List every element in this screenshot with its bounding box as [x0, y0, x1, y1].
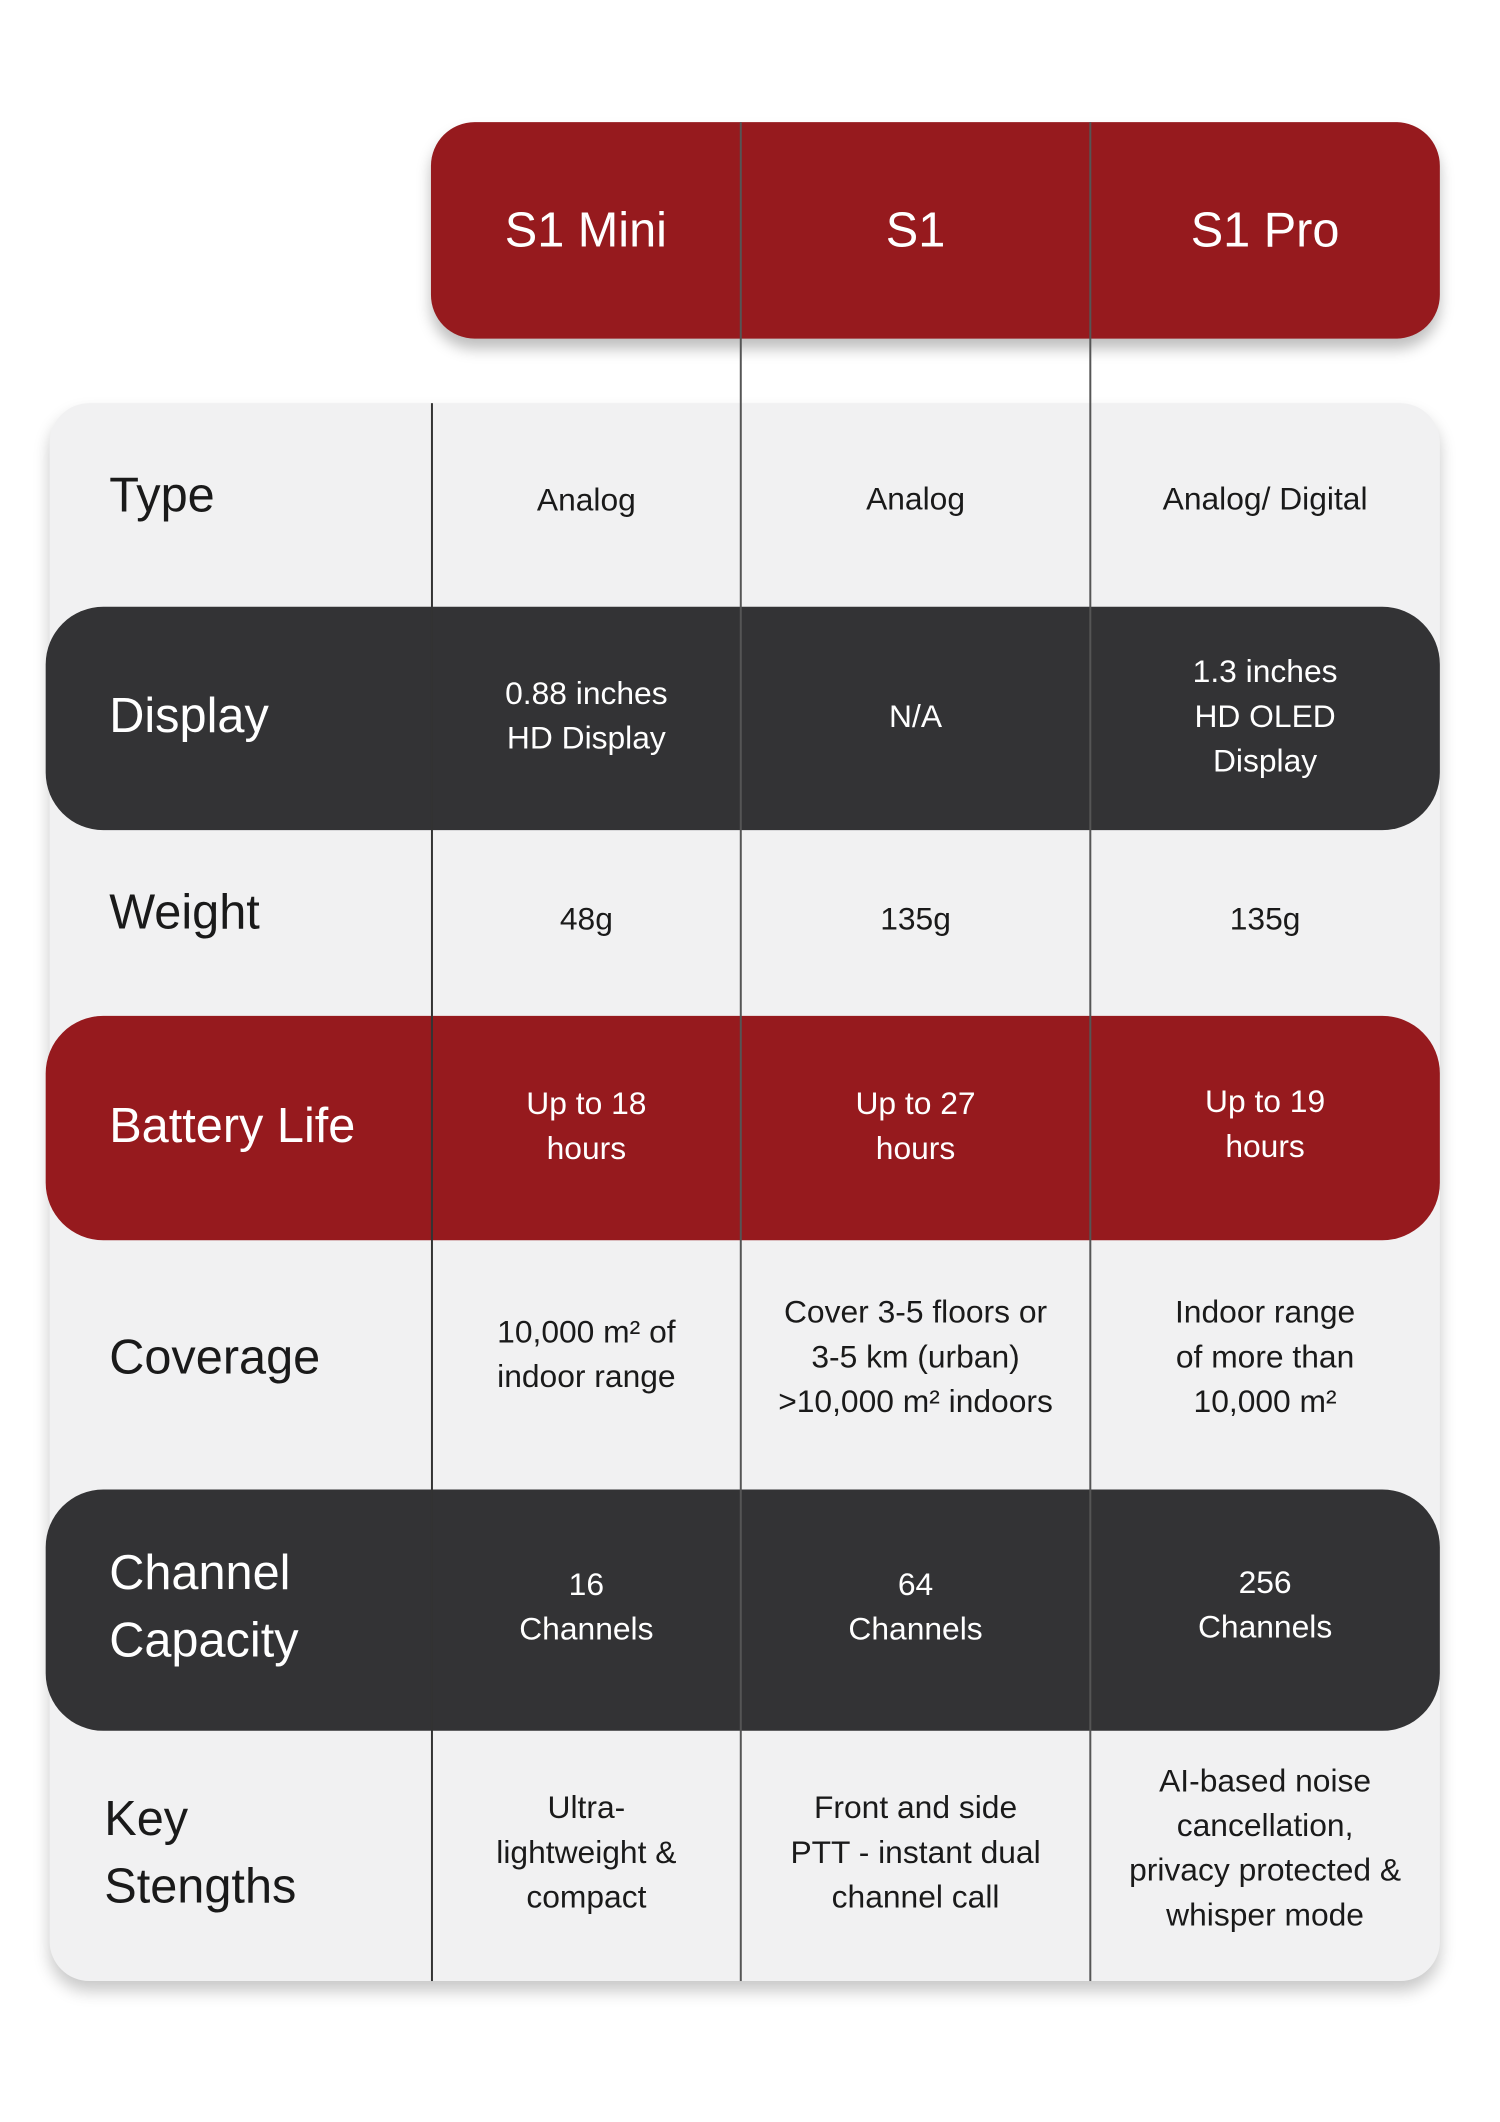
row: Weight [109, 885, 1300, 939]
header: S1 Pro: S1 Pro [1191, 204, 1339, 257]
row band: Battery Life [46, 1016, 1440, 1240]
cell: Channels [1198, 1609, 1332, 1644]
cell: Cover 3-5 floors or [784, 1294, 1047, 1330]
label: Weight: Weight [109, 885, 260, 939]
label: Coverage: Coverage [109, 1330, 320, 1384]
cell [526, 1085, 646, 1166]
header: S1: S1 [886, 204, 945, 257]
label: Battery Life: Battery Life [109, 1099, 355, 1153]
cell: Indoor range [1175, 1294, 1355, 1330]
cell: whisper mode [1166, 1896, 1364, 1932]
cell: 0.88 inches [505, 675, 668, 711]
cell: Analog [537, 482, 636, 517]
cell [1175, 1294, 1355, 1419]
cell: AI-based noise [1159, 1762, 1371, 1798]
cell: HD Display [507, 720, 666, 756]
cell [778, 1294, 1053, 1419]
cell: 64 [898, 1566, 933, 1602]
cell: of more than [1176, 1339, 1354, 1374]
row: Display [109, 653, 1338, 778]
table panel [50, 403, 1440, 1981]
cell: Display [1213, 742, 1317, 778]
cell: privacy protected & [1129, 1851, 1401, 1887]
row: Key Strengths [104, 1762, 1401, 1932]
cell: HD OLED [1194, 698, 1336, 733]
row: Coverage [109, 1294, 1355, 1419]
label: Key Strengths [104, 1792, 296, 1913]
cell: 1.3 inches [1193, 653, 1338, 689]
cell: PTT - instant dual [790, 1834, 1041, 1870]
cell: 10,000 m² [1194, 1383, 1337, 1419]
cell: compact [526, 1879, 646, 1915]
cell: hours [547, 1130, 626, 1166]
cell: channel call [832, 1879, 999, 1915]
cell: cancellation, [1177, 1807, 1353, 1843]
cell [1205, 1083, 1325, 1164]
cell: lightweight & [496, 1834, 676, 1870]
cell [790, 1789, 1041, 1915]
cell: hours [1225, 1128, 1305, 1164]
cell: Ultra- [548, 1789, 625, 1825]
row: Channel Capacity [109, 1546, 1332, 1667]
cell: Up to 19 [1205, 1083, 1325, 1119]
row: Battery Life [109, 1083, 1325, 1166]
cell [848, 1566, 983, 1646]
cell [1198, 1564, 1332, 1644]
cell: N/A [889, 698, 942, 733]
label: Display: Display [109, 689, 269, 743]
label: Key Strengths: Stengths [104, 1859, 296, 1913]
label: Channel Capacity [109, 1546, 299, 1667]
cell: 48g [560, 900, 613, 936]
cell: Analog [866, 480, 965, 516]
cell: 3-5 km (urban) [811, 1339, 1020, 1374]
cell [1129, 1762, 1401, 1932]
cell: 256 [1239, 1564, 1292, 1600]
cell: 135g [880, 900, 951, 936]
cell: Channels [519, 1611, 653, 1646]
cell: Up to 18 [526, 1085, 646, 1121]
cell: 135g [1230, 900, 1300, 936]
cell: hours [876, 1130, 955, 1166]
label: Key Strengths: Key [104, 1792, 188, 1845]
row band: Channel Capacity [46, 1490, 1440, 1731]
cell: 16 [569, 1566, 604, 1602]
cell: Front and side [814, 1789, 1017, 1825]
row: Type [109, 468, 1368, 522]
cell: >10,000 m² indoors [778, 1383, 1053, 1419]
cell [496, 1789, 676, 1915]
cell: Channels [848, 1611, 983, 1646]
cell [519, 1566, 653, 1646]
label: Channel Capacity: Capacity [109, 1614, 299, 1667]
cell [505, 675, 668, 756]
cell: Up to 27 [855, 1085, 976, 1121]
cell [1193, 653, 1338, 778]
cell [497, 1314, 676, 1394]
row band: Display [46, 607, 1440, 830]
label: Channel Capacity: Channel [109, 1546, 290, 1600]
header: S1 Mini: S1 Mini [505, 204, 667, 257]
header bar [431, 122, 1440, 339]
label: Type: Type [109, 468, 215, 522]
cell: indoor range [497, 1358, 676, 1394]
cell [855, 1085, 976, 1166]
cell: 10,000 m² of [497, 1314, 676, 1349]
cell: Analog/ Digital [1163, 480, 1368, 516]
